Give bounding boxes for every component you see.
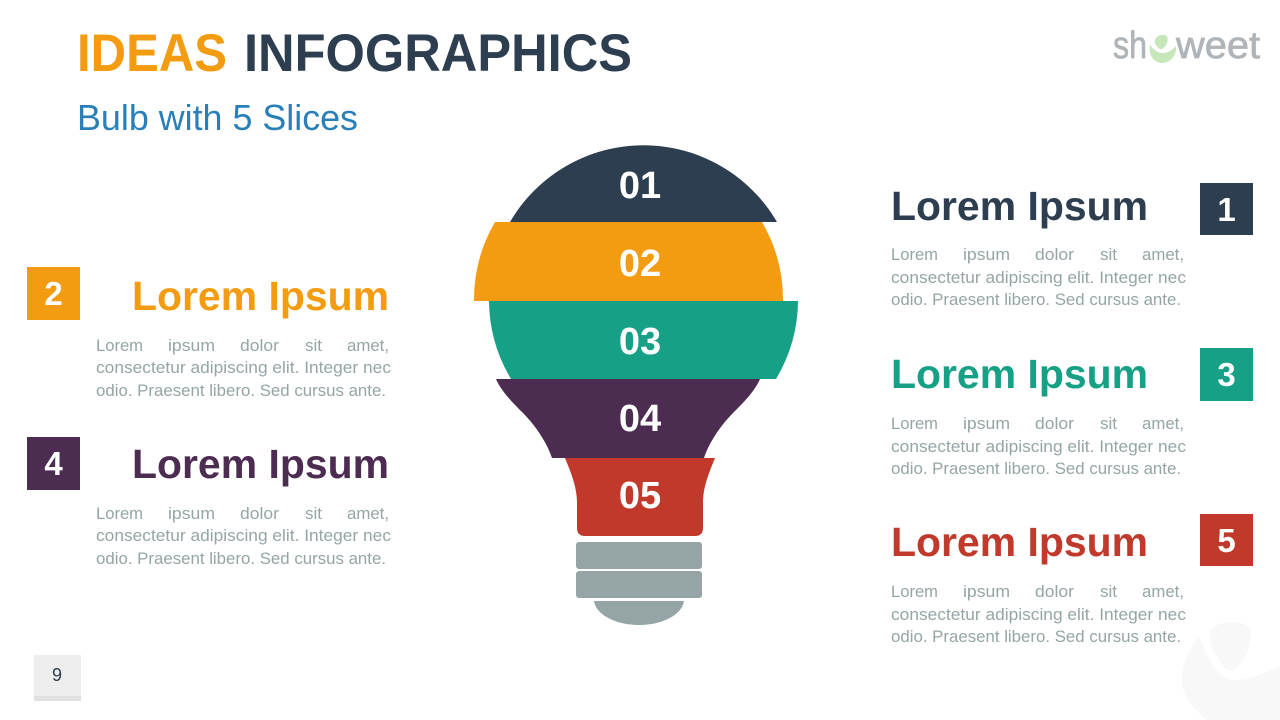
text block 3: odio. Praesent libero. Sed cursus ante.	[891, 460, 1181, 478]
logo: showeet: sh	[1113, 25, 1147, 67]
watermark logo	[1182, 622, 1280, 720]
text block 5: consectetur adipiscing elit. Integer nec	[891, 606, 1186, 624]
text block 5: sit	[1100, 583, 1117, 601]
slice 02: 02	[619, 243, 661, 285]
text block 5: dolor	[1035, 583, 1075, 601]
text block 5: amet,	[1142, 583, 1184, 601]
title: INFOGRAPHICS	[244, 24, 632, 83]
subtitle: Bulb with 5 Slices	[77, 97, 358, 138]
text block 1	[891, 246, 1186, 309]
icon: logo mark	[1150, 35, 1176, 63]
text block 4: dolor	[240, 505, 280, 523]
text block 5	[891, 583, 1186, 646]
heading 4: Lorem Ipsum	[132, 441, 389, 487]
panel: item 4	[27, 437, 391, 568]
text block 4: Lorem	[96, 505, 143, 523]
text block 2: amet,	[347, 337, 389, 355]
text block 2	[96, 337, 391, 400]
slice 05: 05	[619, 475, 661, 517]
text block 4: odio. Praesent libero. Sed cursus ante.	[96, 550, 386, 568]
page number: 9	[52, 665, 62, 685]
text block 2: dolor	[240, 337, 280, 355]
logo: showeet: weet	[1175, 25, 1260, 67]
title: IDEAS	[77, 24, 227, 83]
page number	[34, 655, 81, 701]
text block 1: Lorem	[891, 246, 938, 264]
text block 1: amet,	[1142, 246, 1184, 264]
text block 2: odio. Praesent libero. Sed cursus ante.	[96, 382, 386, 400]
slice 05	[565, 458, 715, 536]
bulb graphic	[474, 145, 798, 625]
text block 3: dolor	[1035, 415, 1075, 433]
text block 1: consectetur adipiscing elit. Integer nec	[891, 269, 1186, 287]
heading 5: Lorem Ipsum	[891, 519, 1148, 565]
heading 3: Lorem Ipsum	[891, 351, 1148, 397]
panel: item 1	[891, 183, 1253, 309]
text block 3: sit	[1100, 415, 1117, 433]
text block 3: consectetur adipiscing elit. Integer nec	[891, 438, 1186, 456]
badge 4: 4	[44, 445, 63, 482]
text block 5: Lorem	[891, 583, 938, 601]
heading 2: Lorem Ipsum	[132, 273, 389, 319]
panel: item 3	[891, 348, 1253, 478]
text block 4: consectetur adipiscing elit. Integer nec	[96, 527, 391, 545]
badge 5	[1200, 514, 1253, 566]
text block 3: amet,	[1142, 415, 1184, 433]
badge 1: 1	[1217, 191, 1236, 228]
text block 4: ipsum	[168, 505, 215, 523]
text block 1: odio. Praesent libero. Sed cursus ante.	[891, 291, 1181, 309]
slice 01	[510, 145, 777, 222]
text block 1: sit	[1100, 246, 1117, 264]
text block 2: sit	[305, 337, 322, 355]
slice 01: 01	[619, 165, 661, 207]
slice 02	[474, 222, 783, 301]
text block 5: ipsum	[963, 583, 1010, 601]
badge 2	[27, 267, 80, 320]
text block 3: Lorem	[891, 415, 938, 433]
slice 03	[489, 301, 798, 379]
badge 2: 2	[44, 275, 63, 312]
text block 2: Lorem	[96, 337, 143, 355]
badge 3: 3	[1217, 356, 1236, 393]
text block 4: amet,	[347, 505, 389, 523]
badge 4	[27, 437, 80, 490]
text block 3	[891, 415, 1186, 478]
badge 1	[1200, 183, 1253, 235]
text block 4: sit	[305, 505, 322, 523]
text block 1: dolor	[1035, 246, 1075, 264]
text block 2: ipsum	[168, 337, 215, 355]
badge 5: 5	[1217, 522, 1236, 559]
slice 03: 03	[619, 321, 661, 363]
text block 2: consectetur adipiscing elit. Integer nec	[96, 359, 391, 377]
panel: item 5	[891, 514, 1253, 646]
bulb base	[576, 542, 702, 625]
badge 3	[1200, 348, 1253, 401]
text block 1: ipsum	[963, 246, 1010, 264]
panel: item 2	[27, 267, 391, 400]
text block 3: ipsum	[963, 415, 1010, 433]
text block 4	[96, 505, 391, 568]
text block 5: odio. Praesent libero. Sed cursus ante.	[891, 628, 1181, 646]
slice 04	[496, 379, 760, 458]
logo: showeet	[1113, 25, 1260, 67]
heading 1: Lorem Ipsum	[891, 183, 1148, 229]
slice 04: 04	[619, 398, 661, 440]
title	[77, 24, 632, 83]
